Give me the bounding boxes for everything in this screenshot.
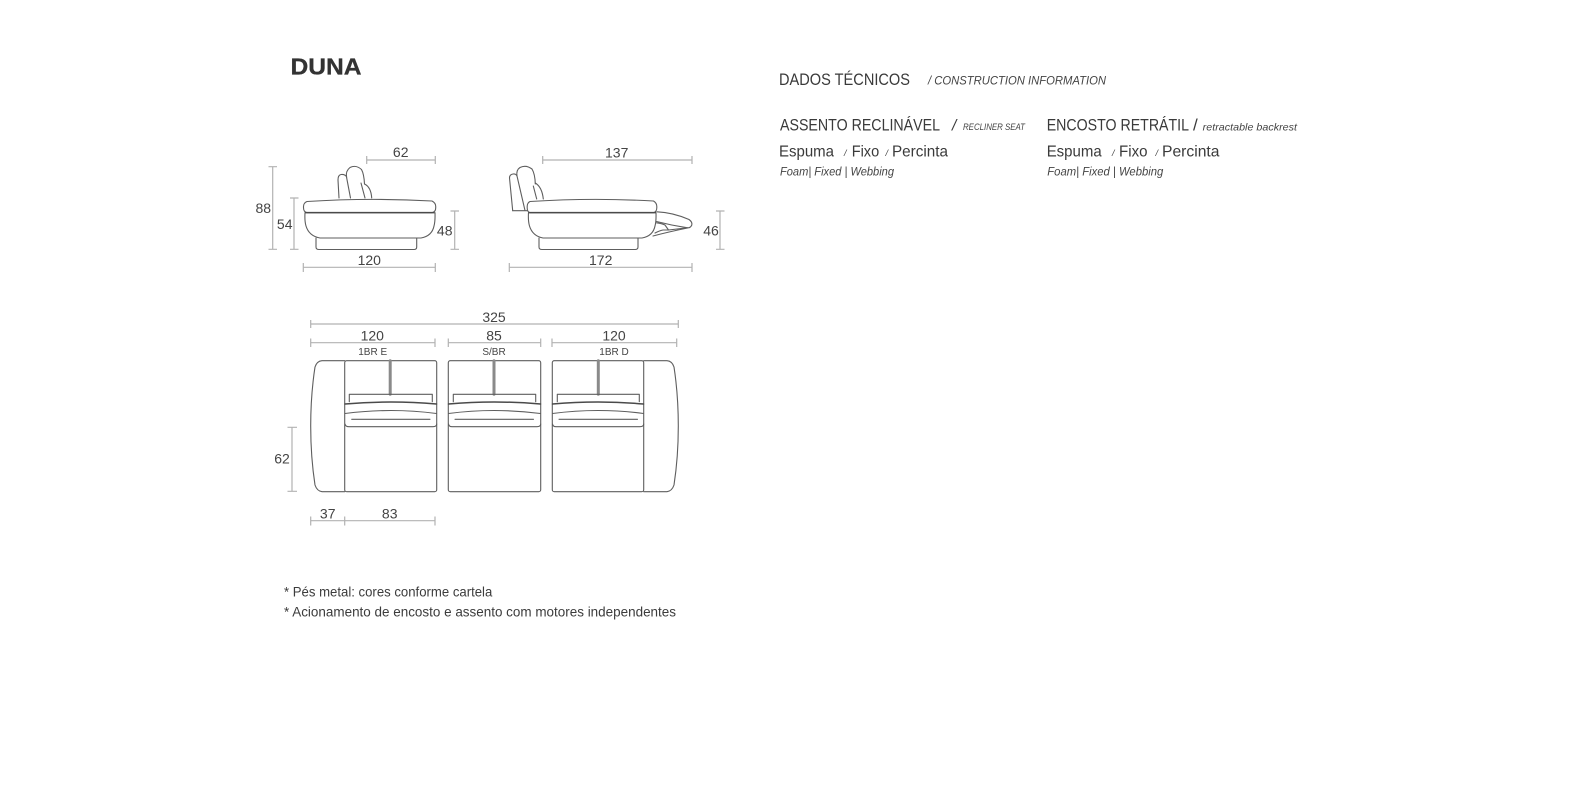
spec column: retractable backrest: / xyxy=(1154,148,1160,158)
spec column: recliner seat: / xyxy=(884,148,890,158)
reclined backrest outline xyxy=(510,166,543,211)
spec column: retractable backrest: Foam| Fixed | Webbing xyxy=(1047,166,1164,178)
side view drawing: seated position: 62 xyxy=(393,144,409,160)
spec column: retractable backrest: Fixo xyxy=(1119,144,1148,161)
side view drawing: seated position: 88 xyxy=(256,200,271,216)
dimensions xyxy=(509,156,724,272)
top view drawing: three modules with arms: 1BR D xyxy=(599,347,629,358)
backrest outline xyxy=(338,166,372,198)
top view drawing: three modules with arms: 120 xyxy=(602,328,626,344)
spec column: recliner seat: Percinta xyxy=(892,144,948,161)
spec column: recliner seat: / xyxy=(843,148,848,158)
spec column: retractable backrest: / xyxy=(1111,148,1116,158)
spec column: retractable backrest: Espuma xyxy=(1047,144,1102,161)
notes: * Pés metal: cores conforme cartela xyxy=(284,584,492,600)
top view drawing: three modules with arms: 1BR E xyxy=(358,347,387,358)
side view drawing: seated position: 48 xyxy=(437,223,453,239)
spec column: retractable backrest: retractable backrest xyxy=(1203,122,1298,134)
footrest outline xyxy=(653,212,692,236)
side view drawing: reclined position xyxy=(509,145,724,272)
top view drawing: three modules with arms: 325 xyxy=(482,309,506,325)
seat and base outline xyxy=(303,199,436,250)
spec column: recliner seat xyxy=(779,116,1026,179)
spec column: retractable backrest: Percinta xyxy=(1162,144,1220,161)
top view drawing: three modules with arms: 85 xyxy=(486,328,502,344)
notes: * Acionamento de encosto e assento com motores independentes xyxy=(284,604,676,620)
notes xyxy=(284,584,676,620)
spec column: recliner seat: Fixo xyxy=(852,144,879,161)
side view drawing: seated position: 54 xyxy=(277,216,293,232)
module: S/BR xyxy=(448,361,541,492)
spec column: recliner seat: ASSENTO RECLINÁVEL xyxy=(780,116,940,135)
spec column: recliner seat: Foam| Fixed | Webbing xyxy=(780,167,895,179)
side view drawing: reclined position: 46 xyxy=(703,223,719,239)
dimensions xyxy=(268,156,459,272)
top view drawing: three modules with arms: 37 xyxy=(320,505,336,521)
right arm xyxy=(644,361,678,492)
spec column: retractable backrest xyxy=(1047,116,1298,178)
top view drawing: three modules with arms: 120 xyxy=(361,328,384,344)
spec column: recliner seat: Espuma xyxy=(779,144,834,161)
side view drawing: seated position xyxy=(256,144,459,272)
top view drawing: three modules with arms xyxy=(274,309,678,526)
side view drawing: reclined position: 172 xyxy=(589,252,613,268)
left arm xyxy=(311,361,345,492)
heading: technical data: / CONSTRUCTION INFORMATION xyxy=(927,75,1107,87)
heading: technical data xyxy=(779,70,1107,89)
heading: technical data: DADOS TÉCNICOS xyxy=(779,70,910,89)
top view drawing: three modules with arms: 83 xyxy=(382,505,398,521)
spec column: retractable backrest: / xyxy=(1193,116,1198,135)
title: DUNA xyxy=(290,53,362,79)
dimensions xyxy=(288,320,678,526)
module: 1BR E xyxy=(345,361,437,492)
spec column: retractable backrest: ENCOSTO RETRÁTIL xyxy=(1047,116,1189,135)
module: 1BR D xyxy=(552,361,644,492)
reclined seat and base outline xyxy=(527,199,657,250)
side view drawing: seated position: 120 xyxy=(358,252,381,268)
top view drawing: three modules with arms: S/BR xyxy=(482,347,506,358)
spec column: recliner seat: / xyxy=(951,118,958,135)
top view drawing: three modules with arms: 62 xyxy=(274,450,290,466)
side view drawing: reclined position: 137 xyxy=(605,145,629,161)
spec column: recliner seat: RECLINER SEAT xyxy=(963,122,1026,133)
